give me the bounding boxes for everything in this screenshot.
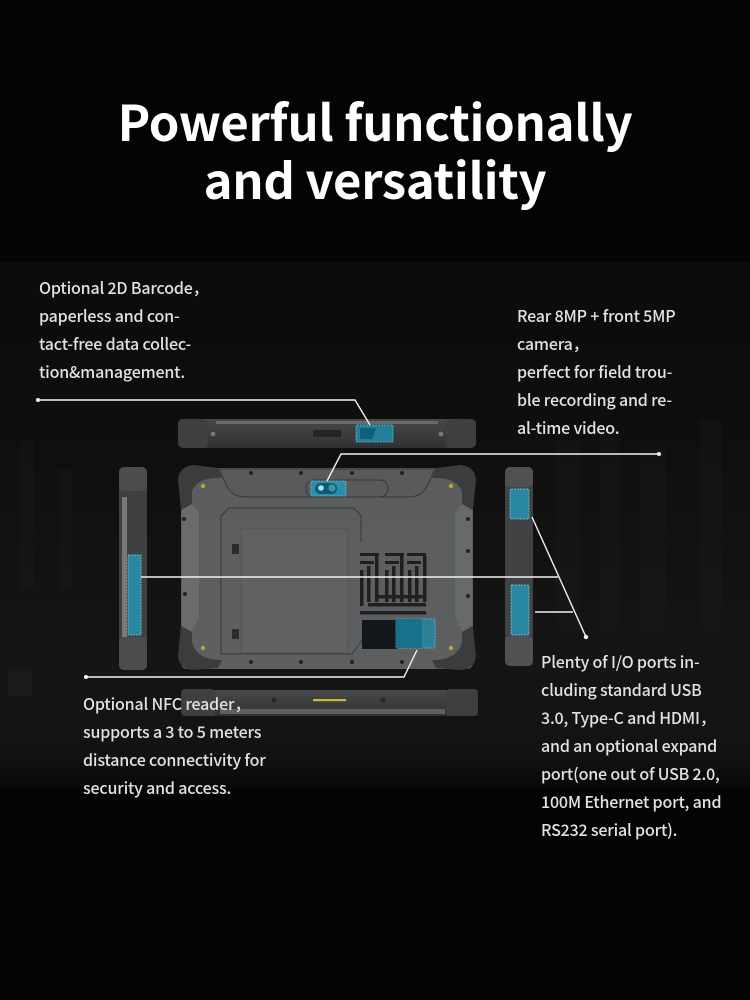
callout text: 2D barcode: Optional 2D Barcode， — [39, 275, 208, 299]
callout text: I/O ports — [541, 649, 721, 841]
bottom edge view of tablet — [181, 689, 478, 716]
callout text: I/O ports: Plenty of I/O ports in- — [541, 649, 700, 673]
callout text: camera: perfect for field trou- — [517, 359, 672, 383]
callout text: I/O ports: and an optional expand — [541, 733, 717, 757]
left side view of tablet — [119, 467, 147, 670]
right side view of tablet — [505, 467, 533, 666]
callout text: NFC reader: Optional NFC reader， — [83, 691, 250, 715]
top edge view of tablet — [178, 419, 476, 448]
callout text: I/O ports: 100M Ethernet port, and — [541, 789, 721, 813]
callout text: NFC reader: supports a 3 to 5 meters — [83, 719, 261, 743]
title — [118, 85, 632, 214]
title: and versatility — [204, 143, 546, 214]
callout text: camera: Rear 8MP + front 5MP — [517, 303, 675, 327]
title: Powerful functionally — [118, 85, 632, 156]
callout text: 2D barcode: tact-free data collec- — [39, 331, 191, 355]
callout text: NFC reader: distance connectivity for — [83, 747, 266, 771]
device label — [362, 620, 398, 649]
callout text: camera — [517, 303, 675, 439]
callout text: I/O ports: 3.0, Type-C and HDMI， — [541, 705, 716, 729]
rugged side bands — [182, 504, 199, 632]
port highlight bottom — [511, 585, 529, 635]
rubber corners — [178, 465, 222, 510]
callout text: I/O ports: RS232 serial port). — [541, 817, 677, 841]
callout text: 2D barcode: paperless and con- — [39, 303, 180, 327]
callout text: I/O ports: port(one out of USB 2.0, — [541, 761, 720, 785]
barcode highlight — [356, 425, 393, 442]
NFC highlight — [396, 619, 435, 648]
callout text: NFC reader: security and access. — [83, 775, 231, 799]
rear view of tablet — [178, 465, 476, 670]
vent pattern — [360, 553, 426, 614]
callout text: camera: ble recording and re- — [517, 387, 672, 411]
callout text: 2D barcode — [39, 275, 208, 383]
camera highlight — [311, 481, 346, 496]
callout text: camera: camera， — [517, 331, 588, 355]
callout text: camera: al-time video. — [517, 415, 619, 439]
side highlight left — [128, 555, 141, 635]
callout text: 2D barcode: tion&management. — [39, 359, 185, 383]
port highlight top — [510, 489, 529, 519]
callout text: I/O ports: cluding standard USB — [541, 677, 702, 701]
screws — [201, 484, 453, 650]
callout text: NFC reader — [83, 691, 266, 799]
